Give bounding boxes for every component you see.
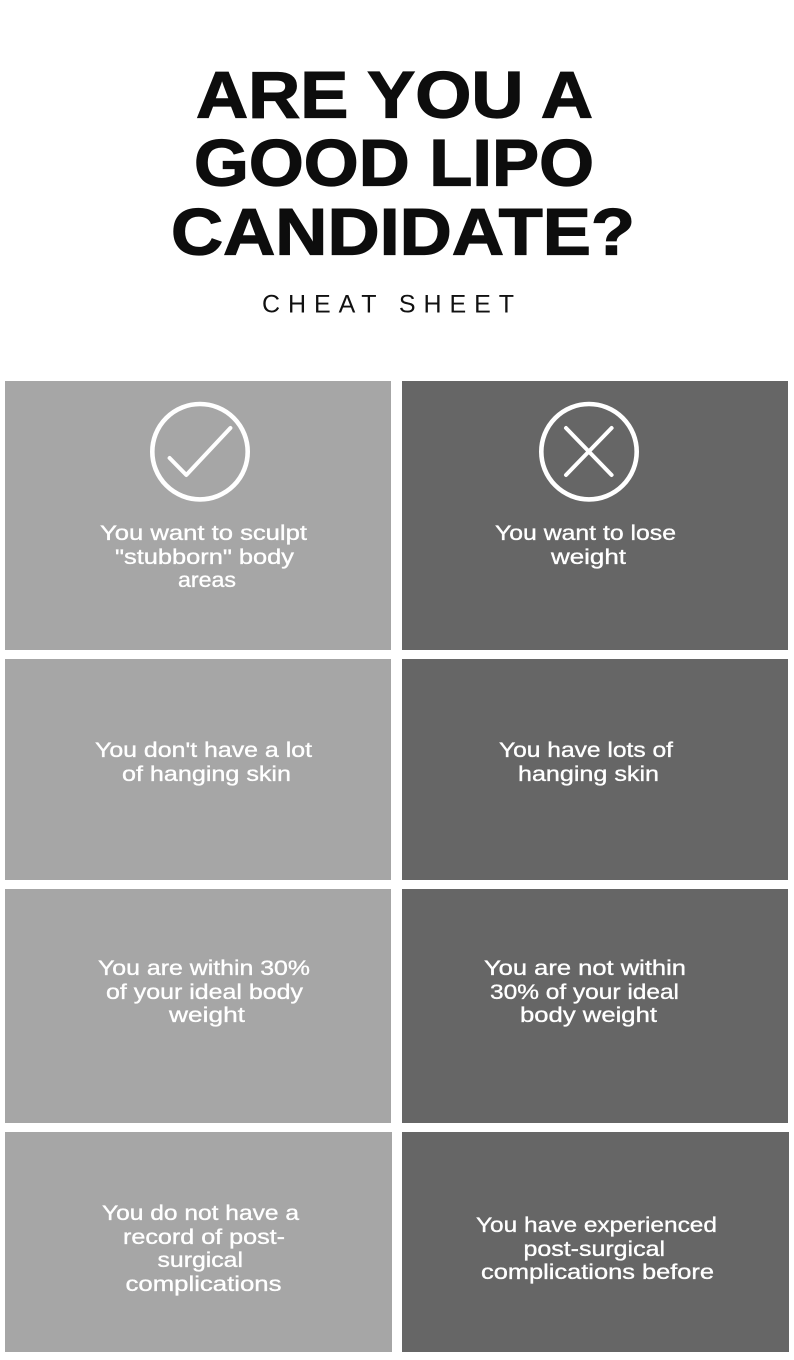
panel text: You have experienced [476, 1213, 717, 1237]
panel text: 30% of your ideal [490, 980, 679, 1004]
panel: good candidate, sculpt stubborn areas [5, 381, 391, 650]
icon: check mark in circle [152, 404, 248, 499]
header [171, 58, 635, 318]
panel text [95, 738, 312, 786]
panel text: surgical [158, 1248, 243, 1272]
panel text: You want to sculpt [100, 521, 307, 545]
panel text [476, 1213, 717, 1284]
panel text [499, 738, 673, 786]
panel text: of your ideal body [106, 980, 303, 1004]
title: GOOD LIPO [194, 126, 594, 200]
title: ARE YOU A [196, 58, 593, 132]
panel text: You have lots of [499, 738, 673, 762]
panel text: body weight [520, 1003, 657, 1027]
panel background [402, 381, 788, 650]
panel background [402, 659, 788, 880]
panel background [5, 381, 391, 650]
panel text: record of post- [123, 1225, 285, 1249]
panel text: You are within 30% [98, 956, 310, 980]
panel background [402, 1132, 789, 1352]
panel text [484, 956, 686, 1027]
panel text: weight [168, 1003, 245, 1027]
panel text: "stubborn" body [115, 545, 294, 569]
panel text: You don't have a lot [95, 738, 312, 762]
panel text: hanging skin [518, 762, 659, 786]
panel text [495, 521, 676, 569]
panel text: post-surgical [524, 1237, 665, 1261]
panel: poor candidate, not within 30% of ideal weight [402, 889, 788, 1123]
panel text: complications before [481, 1260, 714, 1284]
panel text: complications [126, 1272, 282, 1296]
panel: good candidate, little hanging skin [5, 659, 391, 880]
panel text: You are not within [484, 956, 686, 980]
panel background [5, 889, 391, 1123]
panel text [102, 1201, 299, 1296]
panel: good candidate, within 30% of ideal weight [5, 889, 391, 1123]
panel background [5, 659, 391, 880]
panel text: areas [178, 568, 236, 592]
panel: poor candidate, lots of hanging skin [402, 659, 788, 880]
title [171, 58, 635, 268]
panel text: You do not have a [102, 1201, 299, 1225]
panel text: weight [550, 545, 626, 569]
panel: poor candidate, prior post-surgical complications [402, 1132, 789, 1352]
panel text [98, 956, 310, 1027]
title: CANDIDATE? [171, 194, 635, 268]
subtitle: CHEAT SHEET [262, 290, 514, 318]
panel background [5, 1132, 392, 1352]
icon: cross in circle [541, 404, 637, 499]
panel text: of hanging skin [122, 762, 291, 786]
panel: poor candidate, want to lose weight [402, 381, 788, 650]
panel: good candidate, no post-surgical complications [5, 1132, 392, 1352]
panel text [100, 521, 307, 592]
panel background [402, 889, 788, 1123]
panel text: You want to lose [495, 521, 676, 545]
